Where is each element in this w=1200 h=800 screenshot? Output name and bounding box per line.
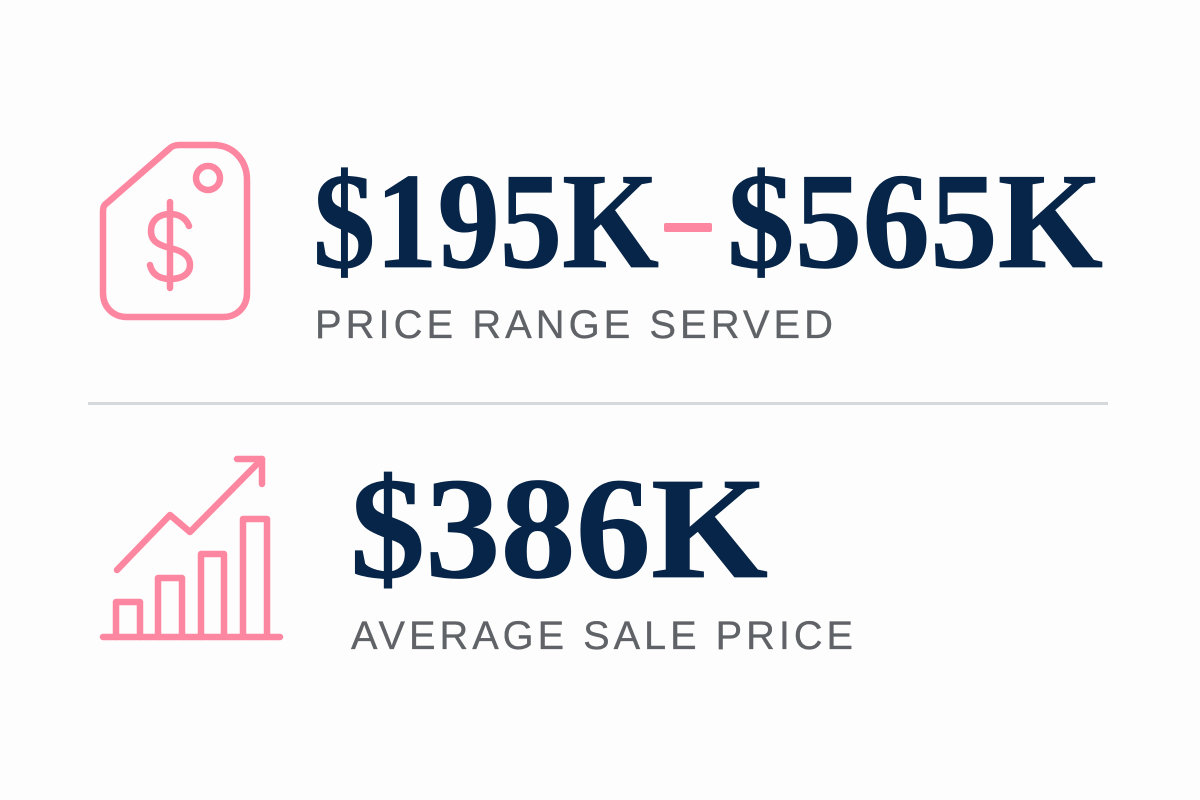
price range value [313, 145, 1103, 297]
price range value: $195K [313, 145, 659, 297]
icon: price tag with dollar sign [103, 145, 247, 317]
icon: bar chart with rising arrow [103, 459, 280, 637]
label: average sale price: AVERAGE SALE PRICE [351, 614, 857, 658]
label: price range served: PRICE RANGE SERVED [315, 303, 837, 347]
average sale price value: $386K [350, 449, 768, 609]
range dash [664, 223, 712, 232]
price range value: $565K [727, 145, 1103, 297]
